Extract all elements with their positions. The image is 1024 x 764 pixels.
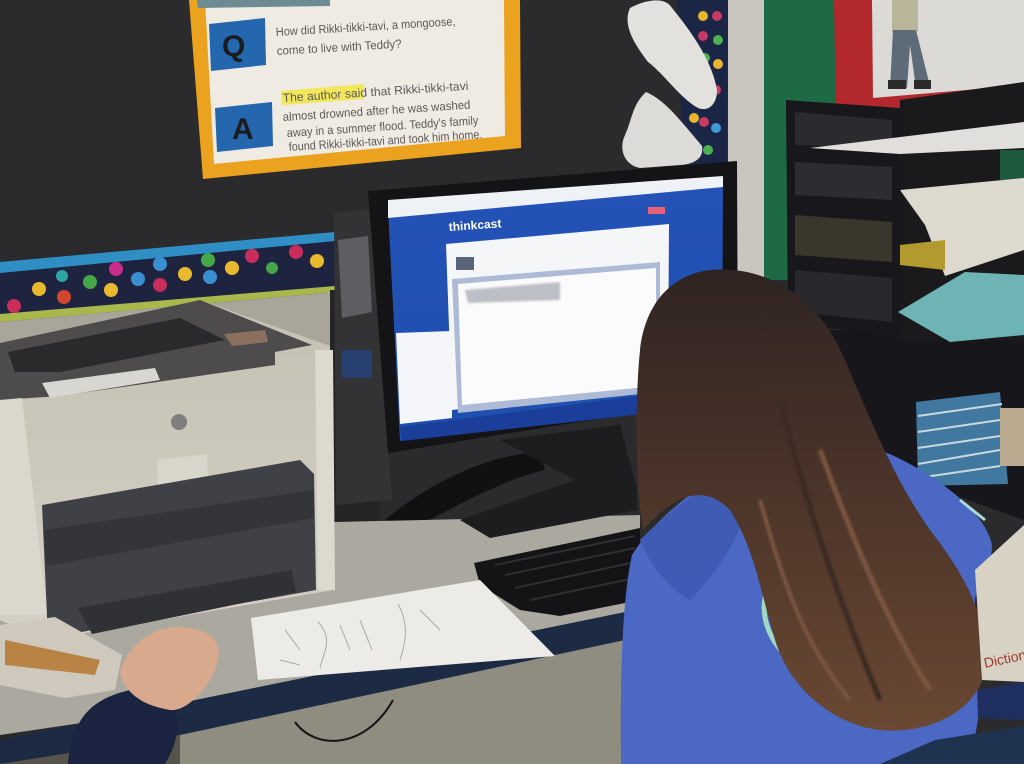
computer tower (334, 209, 545, 525)
dictionaries at right edge (975, 525, 1024, 720)
snack bag (0, 617, 122, 698)
student's arm sleeve (68, 690, 178, 764)
answer text: The author said that Rikki-tikki-tavi (282, 79, 469, 105)
answer text (281, 79, 483, 154)
printer body (0, 300, 333, 640)
printer side panels (315, 350, 335, 590)
right wall and green board (728, 0, 836, 280)
browser screen: thinkcast (448, 216, 502, 234)
A badge: A (232, 113, 254, 146)
student's hand on mouse (120, 627, 219, 710)
printer top cover (0, 300, 312, 400)
stack of thesaurus books (916, 392, 1024, 486)
sheet of paper with notes (251, 580, 555, 680)
right shelf unit (786, 82, 1024, 520)
monitor stand (460, 425, 637, 538)
polka dot bulletin border (0, 232, 335, 322)
monitor (368, 161, 738, 538)
polka dot side border (678, 0, 728, 165)
red poster with figure (834, 0, 1024, 113)
blackboard wall (0, 0, 770, 340)
student's long brown hair (637, 270, 986, 731)
answer text: away in a summer flood. Teddy's family (286, 113, 479, 140)
question text (275, 14, 456, 58)
question text: come to live with Teddy? (276, 37, 402, 58)
A badge (215, 102, 273, 152)
paper footprint cutouts (622, 0, 717, 168)
answer text: almost drowned after he was washed (282, 98, 471, 124)
keyboard (474, 528, 640, 616)
Q badge: Q (222, 30, 245, 63)
desk surface (0, 515, 640, 764)
printer logo and label (171, 414, 187, 430)
question text: How did Rikki-tikki-tavi, a mongoose, (275, 14, 456, 39)
answer text: found Rikki-tikki-tavi and took him home. (288, 127, 483, 154)
printer paper tray (42, 460, 316, 638)
chair back (880, 726, 1024, 764)
classroom Q and A poster (189, 0, 521, 179)
browser screen (388, 176, 723, 441)
student's blue hoodie (621, 450, 992, 764)
Q badge (209, 18, 266, 71)
printer (0, 300, 335, 640)
wall beneath border (0, 290, 380, 640)
